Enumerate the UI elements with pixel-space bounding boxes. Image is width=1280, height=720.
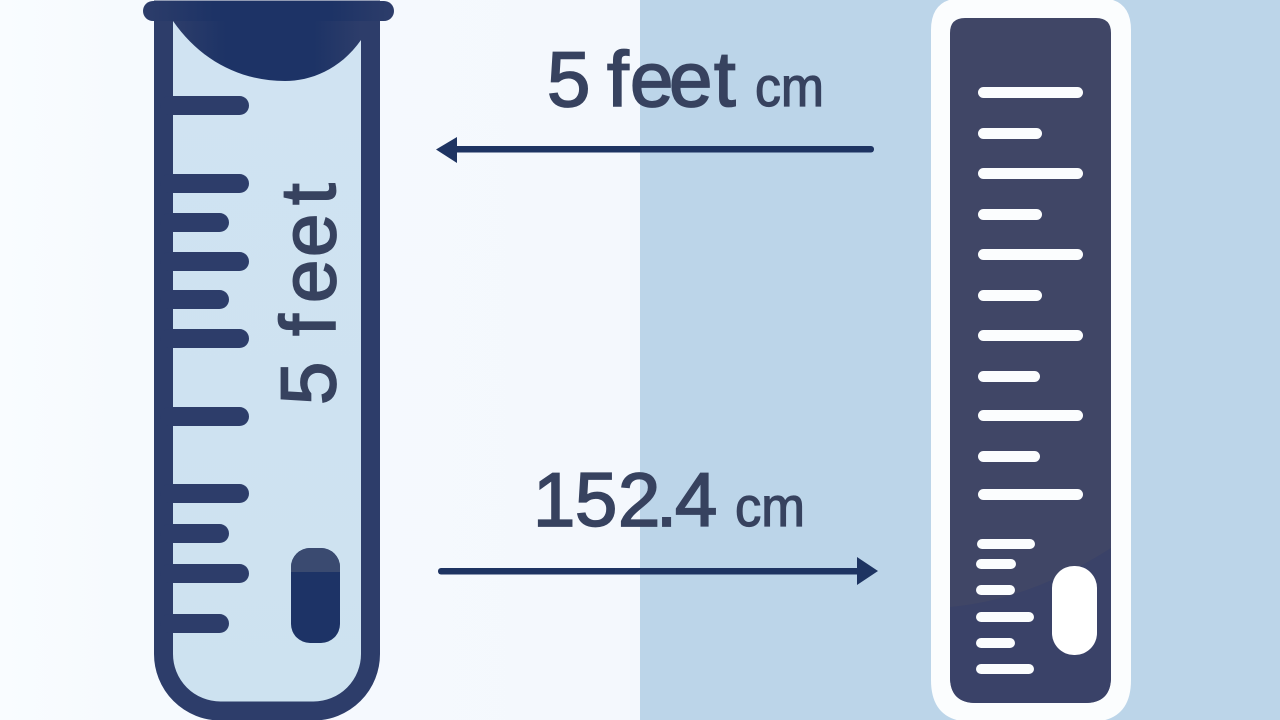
ruler white frame: [931, 0, 1131, 720]
rotated label: 5 feet: 5 feet: [264, 183, 352, 405]
heading: 5 feet cm: 5 feet: [547, 35, 736, 123]
icon: left measuring tube: [143, 1, 394, 711]
ruler lower shade: [950, 548, 1111, 703]
arrow: pointing left: [436, 137, 874, 163]
value: 152.4 cm: cm: [735, 475, 805, 538]
ruler pill indicator: [1052, 566, 1097, 655]
tube pill indicator: [291, 548, 340, 643]
meniscus: [173, 18, 361, 81]
long and short ticks: [976, 87, 1083, 674]
value: 152.4 cm: [533, 458, 805, 543]
value: 152.4 cm: 152.4: [533, 458, 717, 543]
arrow: pointing right: [438, 557, 878, 585]
ruler ticks: [160, 96, 249, 633]
icon: right ruler: [931, 0, 1131, 720]
tube body: [164, 10, 370, 711]
ruler dark body: [950, 18, 1111, 703]
heading: 5 feet cm: [547, 35, 824, 123]
heading: 5 feet cm: cm: [755, 55, 824, 118]
panel: right background: [640, 0, 1280, 720]
tube rim: [143, 1, 394, 21]
panel: left background: [0, 0, 640, 720]
